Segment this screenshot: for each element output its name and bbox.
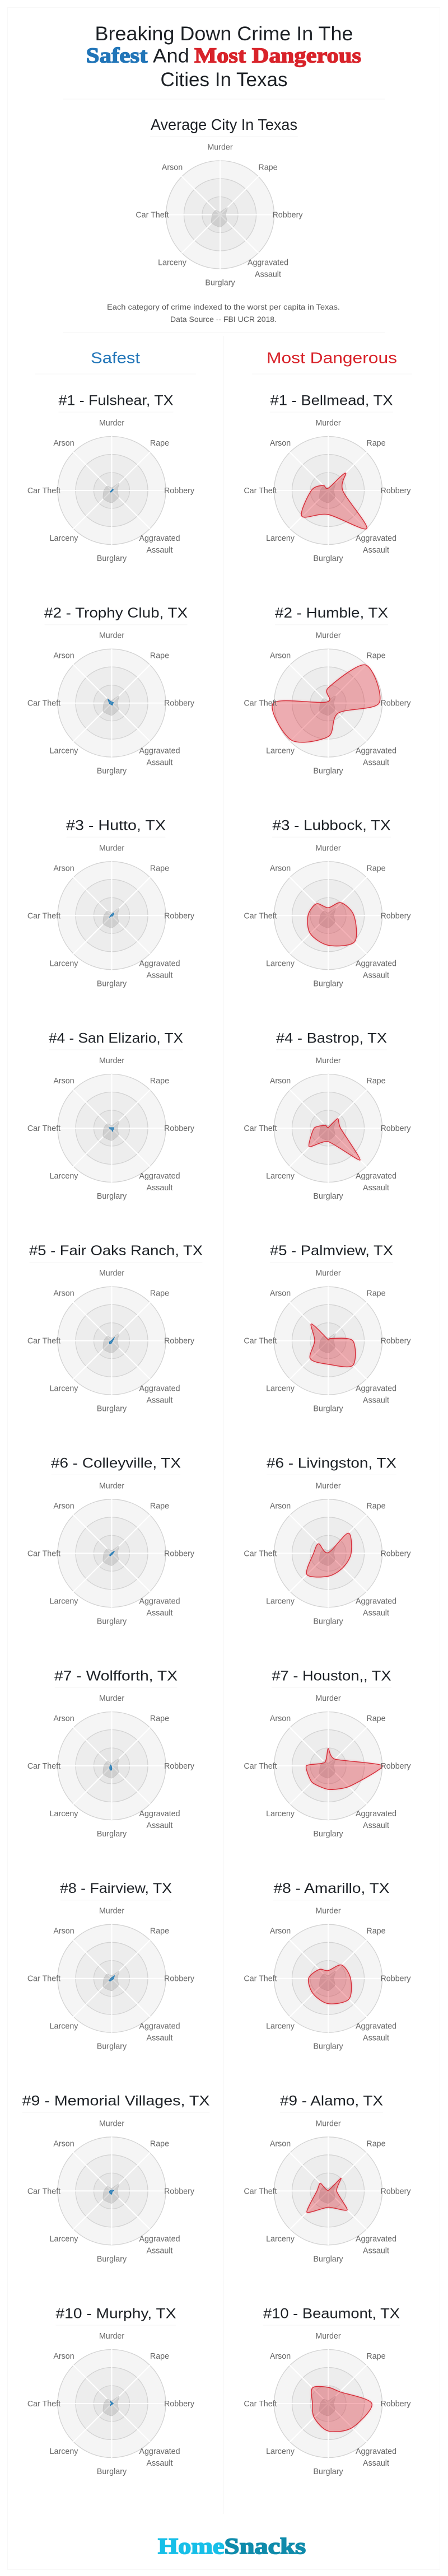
note: methodology and data source: Each category of crime indexed to the worst per capita in Texas.: [107, 302, 340, 311]
data shape: Fairview: [109, 1976, 114, 1981]
panel: dangerous #6 Livingston: #6 - Livingston, TX: [267, 1456, 396, 1471]
panel: dangerous #5 Palmview: [244, 1243, 411, 1414]
panel: dangerous #4 Bastrop: Assault: [363, 1184, 389, 1193]
panel: safest #3 Hutto: Assault: [147, 971, 172, 980]
panel: safest #2 Trophy Club: Murder: [99, 632, 124, 641]
panel: dangerous #6 Livingston: Larceny: [266, 1597, 295, 1606]
panel: dangerous #2 Humble: Burglary: [313, 767, 343, 776]
panel: safest #9 Memorial Villages: [22, 2093, 210, 2264]
title: Breaking Down Crime In The: [95, 23, 353, 45]
panel: dangerous #3 Lubbock: Aggravated: [356, 959, 396, 968]
panel: dangerous #9 Alamo: Car Theft: [244, 2187, 277, 2196]
panel: dangerous #4 Bastrop: Burglary: [313, 1192, 343, 1201]
panel: dangerous #9 Alamo: Larceny: [266, 2234, 295, 2243]
panel: dangerous #1 Bellmead: Car Theft: [244, 487, 277, 495]
panel: dangerous #4 Bastrop: [244, 1030, 411, 1201]
panel: safest #9 Memorial Villages: Arson: [53, 2139, 74, 2148]
panel: safest #4 San Elizario: Burglary: [97, 1192, 127, 1201]
panel: dangerous #8 Amarillo: Car Theft: [244, 1975, 277, 1984]
panel: dangerous #6 Livingston: Car Theft: [244, 1549, 277, 1558]
panel: safest #9 Memorial Villages: Aggravated: [139, 2234, 180, 2243]
radar chart: average city: Aggravated: [248, 259, 288, 268]
panel: safest #5 Fair Oaks Ranch: Aggravated: [139, 1385, 180, 1394]
note: methodology and data source: Data Source -- FBI UCR 2018.: [170, 315, 277, 324]
panel: dangerous #9 Alamo: Assault: [363, 2246, 389, 2255]
panel: safest #6 Colleyville: Assault: [147, 1609, 172, 1617]
panel: safest #10 Murphy: Rape: [150, 2352, 169, 2361]
panel: dangerous #2 Humble: Assault: [363, 759, 389, 768]
panel: safest #2 Trophy Club: Rape: [150, 652, 169, 661]
title: [86, 23, 361, 91]
panel: dangerous #10 Beaumont: Burglary: [313, 2467, 343, 2476]
panel: safest #10 Murphy: Robbery: [164, 2400, 195, 2409]
panel: dangerous #6 Livingston: Assault: [363, 1609, 389, 1617]
panel: dangerous #1 Bellmead: [244, 392, 411, 563]
data shape: Fair Oaks Ranch: [110, 1338, 114, 1344]
panel: dangerous #10 Beaumont: Murder: [315, 2332, 341, 2341]
panel: dangerous #5 Palmview: #5 - Palmview, TX: [270, 1243, 393, 1259]
panel: safest #6 Colleyville: Larceny: [50, 1597, 78, 1606]
panel: safest #5 Fair Oaks Ranch: Car Theft: [27, 1337, 60, 1346]
panel: safest #7 Wolfforth: #7 - Wolfforth, TX: [54, 1668, 178, 1684]
panel: safest #1 Fulshear: Assault: [147, 546, 172, 555]
panel: dangerous #3 Lubbock: Car Theft: [244, 911, 277, 920]
panel: safest #4 San Elizario: #4 - San Elizario, TX: [49, 1030, 183, 1046]
panel: safest #6 Colleyville: Robbery: [164, 1549, 195, 1558]
panel: dangerous #2 Humble: Rape: [366, 652, 386, 661]
panel: dangerous #1 Bellmead: #1 - Bellmead, TX: [270, 392, 393, 408]
panel: safest #3 Hutto: Aggravated: [139, 959, 180, 968]
panel: dangerous #3 Lubbock: Assault: [363, 971, 389, 980]
data shape: Beaumont: [311, 2386, 372, 2432]
panel: safest #5 Fair Oaks Ranch: Burglary: [97, 1405, 127, 1414]
radar chart: average city: Murder: [207, 143, 233, 152]
panel: dangerous #3 Lubbock: [244, 818, 411, 988]
panel: safest #6 Colleyville: #6 - Colleyville, TX: [51, 1456, 181, 1471]
panel: safest #2 Trophy Club: Assault: [147, 759, 172, 768]
panel: dangerous #7 Houston: Murder: [315, 1694, 341, 1703]
panel: safest #9 Memorial Villages: Assault: [147, 2246, 172, 2255]
panel: dangerous #4 Bastrop: Arson: [270, 1077, 291, 1086]
panel: dangerous #7 Houston: Assault: [363, 1821, 389, 1830]
panel: dangerous #10 Beaumont: Arson: [270, 2352, 291, 2361]
panel: dangerous #6 Livingston: Robbery: [380, 1549, 411, 1558]
panel: safest #7 Wolfforth: Assault: [147, 1821, 172, 1830]
panel: safest #8 Fairview: Murder: [99, 1907, 124, 1916]
panel: dangerous #8 Amarillo: Arson: [270, 1927, 291, 1936]
panel: dangerous #5 Palmview: Car Theft: [244, 1337, 277, 1346]
panel: safest #3 Hutto: Larceny: [50, 959, 78, 968]
panel: safest #1 Fulshear: Murder: [99, 419, 124, 428]
panel: dangerous #4 Bastrop: Murder: [315, 1056, 341, 1065]
panel: dangerous #7 Houston: Arson: [270, 1714, 291, 1723]
panel: safest #4 San Elizario: Robbery: [164, 1124, 195, 1133]
panel: safest #9 Memorial Villages: Larceny: [50, 2234, 78, 2243]
panel: dangerous #7 Houston: [244, 1668, 411, 1839]
panel: average city in Texas: [107, 116, 340, 324]
data shape: Lubbock: [307, 903, 357, 946]
panel: dangerous #9 Alamo: Robbery: [380, 2187, 411, 2196]
panel: safest #6 Colleyville: Aggravated: [139, 1597, 180, 1606]
panel: safest #10 Murphy: Aggravated: [139, 2447, 180, 2456]
panel: safest #2 Trophy Club: Car Theft: [27, 699, 60, 708]
panel: dangerous #3 Lubbock: Robbery: [380, 911, 411, 920]
panel: safest #5 Fair Oaks Ranch: [27, 1243, 203, 1414]
heading: Safest column: Safest: [91, 349, 140, 366]
panel: dangerous #1 Bellmead: Rape: [366, 439, 386, 448]
panel: safest #2 Trophy Club: #2 - Trophy Club, TX: [44, 605, 188, 621]
panel: safest #10 Murphy: Assault: [147, 2459, 172, 2468]
panel: safest #3 Hutto: Burglary: [97, 979, 127, 988]
heading: average city: Average City In Texas: [151, 116, 297, 133]
panel: safest #1 Fulshear: Rape: [150, 439, 169, 448]
panel: dangerous #3 Lubbock: Rape: [366, 864, 386, 873]
panel: dangerous #9 Alamo: Murder: [315, 2119, 341, 2128]
data shape: Wolfforth: [110, 1765, 112, 1770]
data shape: Alamo: [307, 2178, 347, 2213]
panel: safest #3 Hutto: Arson: [53, 864, 74, 873]
panel: dangerous #8 Amarillo: Assault: [363, 2034, 389, 2043]
panel: safest #9 Memorial Villages: Rape: [150, 2139, 169, 2148]
panel: dangerous #3 Lubbock: Murder: [315, 844, 341, 853]
panel: dangerous #3 Lubbock: #3 - Lubbock, TX: [273, 818, 391, 834]
panel: dangerous #1 Bellmead: Murder: [315, 419, 341, 428]
panel: safest #1 Fulshear: Car Theft: [27, 487, 60, 495]
panel: dangerous #1 Bellmead: Robbery: [380, 487, 411, 495]
panel: safest #1 Fulshear: #1 - Fulshear, TX: [58, 392, 174, 408]
panel: dangerous #3 Lubbock: Larceny: [266, 959, 295, 968]
panel: safest #4 San Elizario: Aggravated: [139, 1172, 180, 1181]
panel: safest #7 Wolfforth: Robbery: [164, 1762, 195, 1771]
panel: dangerous #9 Alamo: Burglary: [313, 2255, 343, 2264]
panel: dangerous #8 Amarillo: Burglary: [313, 2042, 343, 2051]
panel: safest #7 Wolfforth: Burglary: [97, 1830, 127, 1839]
panel: safest #5 Fair Oaks Ranch: Murder: [99, 1269, 124, 1278]
panel: safest #8 Fairview: #8 - Fairview, TX: [60, 1881, 172, 1896]
logo: HomeSnacks: Home: [158, 2533, 224, 2559]
panel: dangerous #1 Bellmead: Aggravated: [356, 534, 396, 543]
panel: safest #9 Memorial Villages: Burglary: [97, 2255, 127, 2264]
panel: safest #10 Murphy: #10 - Murphy, TX: [56, 2306, 176, 2321]
panel: safest #5 Fair Oaks Ranch: Robbery: [164, 1337, 195, 1346]
panel: safest #3 Hutto: #3 - Hutto, TX: [66, 818, 166, 834]
panel: safest #8 Fairview: Larceny: [50, 2022, 78, 2031]
panel: safest #10 Murphy: Arson: [53, 2352, 74, 2361]
panel: dangerous #2 Humble: Aggravated: [356, 747, 396, 756]
panel: dangerous #1 Bellmead: Burglary: [313, 554, 343, 563]
panel: dangerous #6 Livingston: Murder: [315, 1481, 341, 1490]
panel: safest #9 Memorial Villages: Murder: [99, 2119, 124, 2128]
panel: dangerous #5 Palmview: Burglary: [313, 1405, 343, 1414]
panel: dangerous #10 Beaumont: Assault: [363, 2459, 389, 2468]
panel: dangerous #6 Livingston: Aggravated: [356, 1597, 396, 1606]
panel: dangerous #7 Houston: Aggravated: [356, 1810, 396, 1818]
radar chart: average city: Rape: [258, 163, 278, 172]
panel: safest #8 Fairview: Burglary: [97, 2042, 127, 2051]
panel: safest #3 Hutto: Robbery: [164, 911, 195, 920]
panel: dangerous #7 Houston: Rape: [366, 1714, 386, 1723]
panel: dangerous #5 Palmview: Robbery: [380, 1337, 411, 1346]
data shape: Fulshear: [110, 489, 113, 492]
panel: dangerous #6 Livingston: Burglary: [313, 1617, 343, 1626]
heading: Most Dangerous column: Most Dangerous: [267, 349, 397, 366]
panel: safest #6 Colleyville: Murder: [99, 1481, 124, 1490]
data shape: Memorial Villages: [110, 2190, 114, 2194]
panel: dangerous #8 Amarillo: Rape: [366, 1927, 386, 1936]
panel: safest #7 Wolfforth: Car Theft: [27, 1762, 60, 1771]
radar chart: average city: [136, 143, 303, 288]
panel: safest #10 Murphy: [27, 2306, 195, 2476]
data shape: Bastrop: [309, 1119, 360, 1160]
panel: dangerous #7 Houston: Car Theft: [244, 1762, 277, 1771]
panel: safest #2 Trophy Club: Aggravated: [139, 747, 180, 756]
panel: dangerous #4 Bastrop: Larceny: [266, 1172, 295, 1181]
panel: safest #8 Fairview: Arson: [53, 1927, 74, 1936]
panel: safest #10 Murphy: Car Theft: [27, 2400, 60, 2409]
panel: safest #7 Wolfforth: [27, 1668, 195, 1839]
panel: safest #7 Wolfforth: Aggravated: [139, 1810, 180, 1818]
panel: dangerous #1 Bellmead: Arson: [270, 439, 291, 448]
panel: dangerous #7 Houston: Robbery: [380, 1762, 411, 1771]
panel: safest #1 Fulshear: Burglary: [97, 554, 127, 563]
panel: dangerous #8 Amarillo: Larceny: [266, 2022, 295, 2031]
panel: safest #2 Trophy Club: Robbery: [164, 699, 195, 708]
title: Cities In Texas: [160, 69, 288, 91]
radar chart: average city: Arson: [162, 163, 183, 172]
panel: dangerous #6 Livingston: Rape: [366, 1502, 386, 1511]
panel: safest #4 San Elizario: Car Theft: [27, 1124, 60, 1133]
panel: dangerous #2 Humble: Larceny: [266, 747, 295, 756]
panel: safest #2 Trophy Club: Larceny: [50, 747, 78, 756]
panel: safest #7 Wolfforth: Rape: [150, 1714, 169, 1723]
panel: safest #6 Colleyville: Rape: [150, 1502, 169, 1511]
panel: dangerous #8 Amarillo: Murder: [315, 1907, 341, 1916]
panel: dangerous #6 Livingston: Arson: [270, 1502, 291, 1511]
radar chart: average city: Larceny: [158, 259, 187, 268]
panel: dangerous #10 Beaumont: Car Theft: [244, 2400, 277, 2409]
panel: dangerous #9 Alamo: Rape: [366, 2139, 386, 2148]
panel: safest #4 San Elizario: Arson: [53, 1077, 74, 1086]
panel: dangerous #10 Beaumont: [244, 2306, 411, 2476]
title: Most Dangerous: [194, 44, 361, 67]
panel: dangerous #10 Beaumont: Rape: [366, 2352, 386, 2361]
panel: dangerous #10 Beaumont: Larceny: [266, 2447, 295, 2456]
title: Safest: [86, 44, 148, 67]
panel: dangerous #5 Palmview: Arson: [270, 1289, 291, 1298]
panel: dangerous #2 Humble: Arson: [270, 652, 291, 661]
panel: safest #8 Fairview: Rape: [150, 1927, 169, 1936]
data shape: Trophy Club: [108, 699, 113, 705]
panel: safest #9 Memorial Villages: Car Theft: [27, 2187, 60, 2196]
panel: dangerous #4 Bastrop: Aggravated: [356, 1172, 396, 1181]
panel: safest #9 Memorial Villages: Robbery: [164, 2187, 195, 2196]
radar chart: average city: Burglary: [205, 279, 235, 288]
logo: HomeSnacks: Snacks: [224, 2533, 306, 2559]
radar chart: average city: Assault: [255, 270, 281, 279]
panel: dangerous #3 Lubbock: Burglary: [313, 979, 343, 988]
panel: dangerous #2 Humble: Murder: [315, 632, 341, 641]
panel: safest #1 Fulshear: Robbery: [164, 487, 195, 495]
panel: safest #1 Fulshear: Arson: [53, 439, 74, 448]
panel: dangerous #8 Amarillo: [244, 1881, 411, 2051]
note: methodology and data source: [107, 302, 340, 324]
panel: safest #4 San Elizario: [27, 1030, 195, 1201]
panel: dangerous #2 Humble: #2 - Humble, TX: [275, 605, 388, 621]
panel: dangerous #5 Palmview: Rape: [366, 1289, 386, 1298]
data shape: Palmview: [310, 1324, 356, 1367]
panel: safest #10 Murphy: Burglary: [97, 2467, 127, 2476]
panel: safest #2 Trophy Club: Arson: [53, 652, 74, 661]
panel: dangerous #7 Houston: Burglary: [313, 1830, 343, 1839]
panel: dangerous #8 Amarillo: Aggravated: [356, 2022, 396, 2031]
panel: safest #1 Fulshear: [27, 392, 195, 563]
panel: safest #7 Wolfforth: Arson: [53, 1714, 74, 1723]
panel: dangerous #3 Lubbock: Arson: [270, 864, 291, 873]
radar chart: average city: Car Theft: [136, 211, 169, 219]
panel: safest #9 Memorial Villages: #9 - Memorial Villages, TX: [22, 2093, 210, 2109]
panel: safest #2 Trophy Club: Burglary: [97, 767, 127, 776]
panel: safest #4 San Elizario: Larceny: [50, 1172, 78, 1181]
title: And: [153, 45, 189, 67]
data shape: Murphy: [110, 2401, 113, 2406]
panel: dangerous #10 Beaumont: #10 - Beaumont, TX: [263, 2306, 400, 2321]
panel: dangerous #10 Beaumont: Aggravated: [356, 2447, 396, 2456]
panel: safest #10 Murphy: Larceny: [50, 2447, 78, 2456]
data shape: Hutto: [110, 913, 114, 917]
panel: safest #6 Colleyville: [27, 1456, 195, 1626]
panel: dangerous #8 Amarillo: Robbery: [380, 1975, 411, 1984]
panel: safest #7 Wolfforth: Murder: [99, 1694, 124, 1703]
panel: dangerous #5 Palmview: Assault: [363, 1396, 389, 1405]
panel: safest #5 Fair Oaks Ranch: Larceny: [50, 1385, 78, 1394]
panel: safest #1 Fulshear: Larceny: [50, 534, 78, 543]
panel: safest #5 Fair Oaks Ranch: Arson: [53, 1289, 74, 1298]
panel: dangerous #4 Bastrop: Robbery: [380, 1124, 411, 1133]
radar chart: average city: Robbery: [272, 211, 303, 219]
data shape: San Elizario: [109, 1128, 114, 1132]
data shape: Colleyville: [110, 1551, 114, 1556]
panel: dangerous #4 Bastrop: Rape: [366, 1077, 386, 1086]
panel: dangerous #10 Beaumont: Robbery: [380, 2400, 411, 2409]
panel: dangerous #9 Alamo: [244, 2093, 411, 2264]
panel: safest #3 Hutto: Murder: [99, 844, 124, 853]
panel: safest #6 Colleyville: Arson: [53, 1502, 74, 1511]
panel: safest #8 Fairview: Aggravated: [139, 2022, 180, 2031]
panel: dangerous #5 Palmview: Aggravated: [356, 1385, 396, 1394]
data shape: Houston: [306, 1748, 382, 1789]
panel: safest #4 San Elizario: Rape: [150, 1077, 169, 1086]
panel: dangerous #1 Bellmead: Larceny: [266, 534, 295, 543]
panel: safest #8 Fairview: Robbery: [164, 1975, 195, 1984]
panel: safest #2 Trophy Club: [27, 605, 195, 776]
panel: safest #8 Fairview: [27, 1881, 195, 2051]
panel: dangerous #9 Alamo: Aggravated: [356, 2234, 396, 2243]
panel: safest #6 Colleyville: Car Theft: [27, 1549, 60, 1558]
panel: safest #10 Murphy: Murder: [99, 2332, 124, 2341]
panel: safest #1 Fulshear: Aggravated: [139, 534, 180, 543]
panel: dangerous #6 Livingston: [244, 1456, 411, 1626]
panel: dangerous #2 Humble: Car Theft: [244, 699, 277, 708]
panel: safest #6 Colleyville: Burglary: [97, 1617, 127, 1626]
panel: dangerous #4 Bastrop: Car Theft: [244, 1124, 277, 1133]
panel: safest #5 Fair Oaks Ranch: Rape: [150, 1289, 169, 1298]
panel: dangerous #1 Bellmead: Assault: [363, 546, 389, 555]
panel: dangerous #9 Alamo: #9 - Alamo, TX: [280, 2093, 383, 2109]
panel: safest #8 Fairview: Assault: [147, 2034, 172, 2043]
panel: dangerous #5 Palmview: Larceny: [266, 1385, 295, 1394]
data shape: Livingston: [306, 1533, 352, 1577]
panel: dangerous #2 Humble: [244, 605, 411, 776]
panel: safest #3 Hutto: Car Theft: [27, 911, 60, 920]
panel: safest #8 Fairview: Car Theft: [27, 1975, 60, 1984]
panel: dangerous #2 Humble: Robbery: [380, 699, 411, 708]
panel: safest #4 San Elizario: Assault: [147, 1184, 172, 1193]
panel: dangerous #8 Amarillo: #8 - Amarillo, TX: [273, 1881, 390, 1896]
panel: safest #5 Fair Oaks Ranch: #5 - Fair Oaks Ranch, TX: [29, 1243, 203, 1259]
data shape: Bellmead: [301, 473, 367, 529]
data shape: Amarillo: [309, 1965, 352, 2004]
panel: safest #7 Wolfforth: Larceny: [50, 1810, 78, 1818]
panel: dangerous #9 Alamo: Arson: [270, 2139, 291, 2148]
logo: HomeSnacks: [158, 2533, 306, 2559]
panel: safest #3 Hutto: Rape: [150, 864, 169, 873]
panel: dangerous #7 Houston: #7 - Houston,, TX: [272, 1668, 391, 1684]
panel: dangerous #7 Houston: Larceny: [266, 1810, 295, 1818]
panel: safest #4 San Elizario: Murder: [99, 1056, 124, 1065]
panel: dangerous #4 Bastrop: #4 - Bastrop, TX: [276, 1030, 387, 1046]
panel: dangerous #5 Palmview: Murder: [315, 1269, 341, 1278]
data shape: Humble: [272, 665, 380, 742]
panel: safest #3 Hutto: [27, 818, 195, 988]
panel: safest #5 Fair Oaks Ranch: Assault: [147, 1396, 172, 1405]
